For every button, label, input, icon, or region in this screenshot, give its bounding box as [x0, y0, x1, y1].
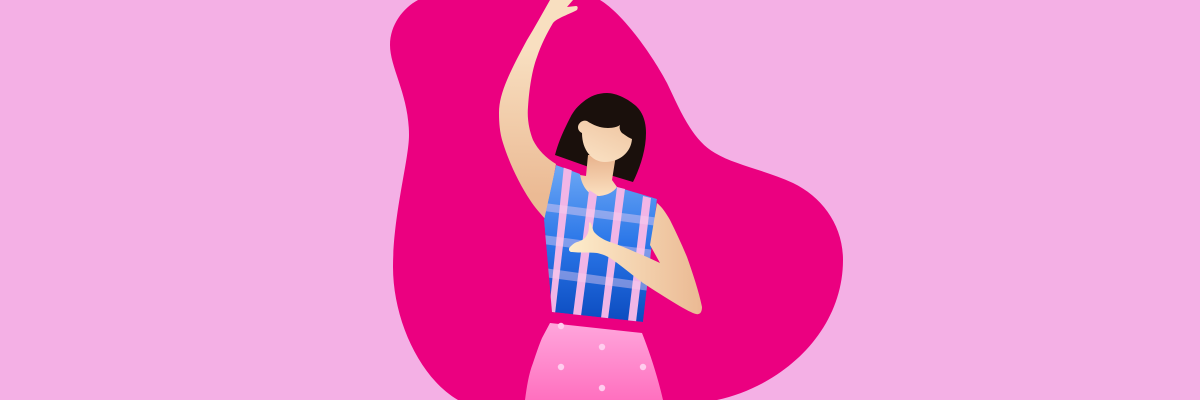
skirt dots	[558, 323, 646, 391]
folded arm	[569, 203, 702, 314]
raised arm	[499, 0, 578, 220]
hair	[555, 93, 646, 182]
face	[578, 121, 632, 162]
shirt bands	[543, 203, 660, 291]
shirt stripes	[549, 165, 651, 322]
skirt	[525, 323, 663, 400]
pink blob	[390, 0, 843, 400]
neck	[580, 155, 617, 196]
sleeveless plaid shirt	[543, 165, 660, 322]
illustration: woman dancing on pink blob	[390, 0, 843, 400]
